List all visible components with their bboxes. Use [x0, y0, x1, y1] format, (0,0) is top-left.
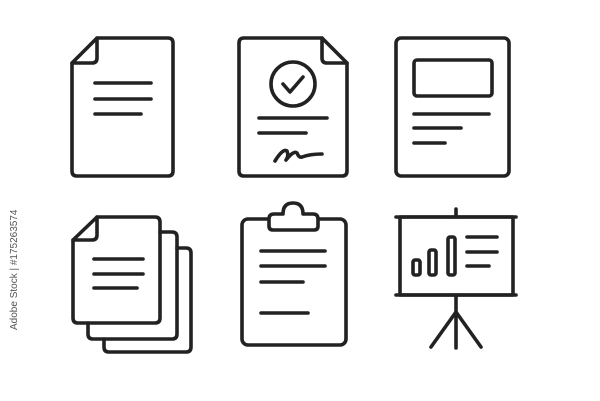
icon: stacked documents — [73, 217, 191, 352]
icon: presentation board — [396, 209, 516, 348]
icon: document — [72, 38, 173, 176]
stock id text: Adobe Stock | #175263574 — [9, 209, 20, 330]
icon: certified document — [239, 38, 347, 176]
icon: report document — [396, 38, 509, 176]
icon: clipboard — [242, 203, 346, 345]
